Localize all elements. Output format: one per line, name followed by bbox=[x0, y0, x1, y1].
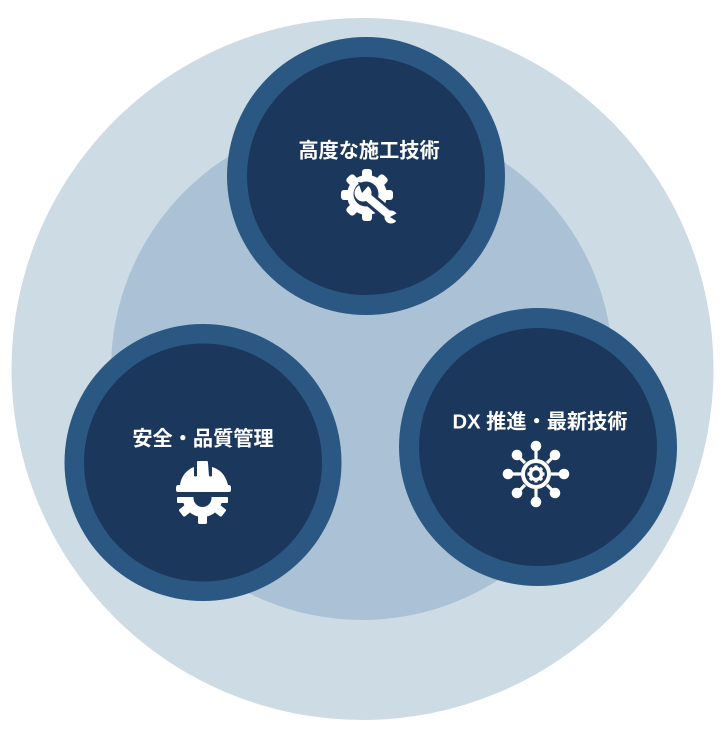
panel: DX promotion and latest technology bbox=[399, 308, 677, 586]
heading: safety and quality management: 安全・品質管理 bbox=[132, 428, 274, 450]
panel: safety and quality management bbox=[64, 324, 342, 601]
inner background circle bbox=[111, 118, 613, 620]
heading: advanced construction technology: 高度な施工技術 bbox=[298, 138, 440, 162]
heading: DX promotion and latest technology: DX 推進・最新技術 bbox=[453, 410, 627, 434]
icon: hard hat with gear bbox=[176, 461, 231, 524]
icon: gear and wrench bbox=[341, 169, 399, 224]
icon: network gear bbox=[503, 441, 569, 507]
panel: advanced construction technology bbox=[227, 37, 505, 315]
